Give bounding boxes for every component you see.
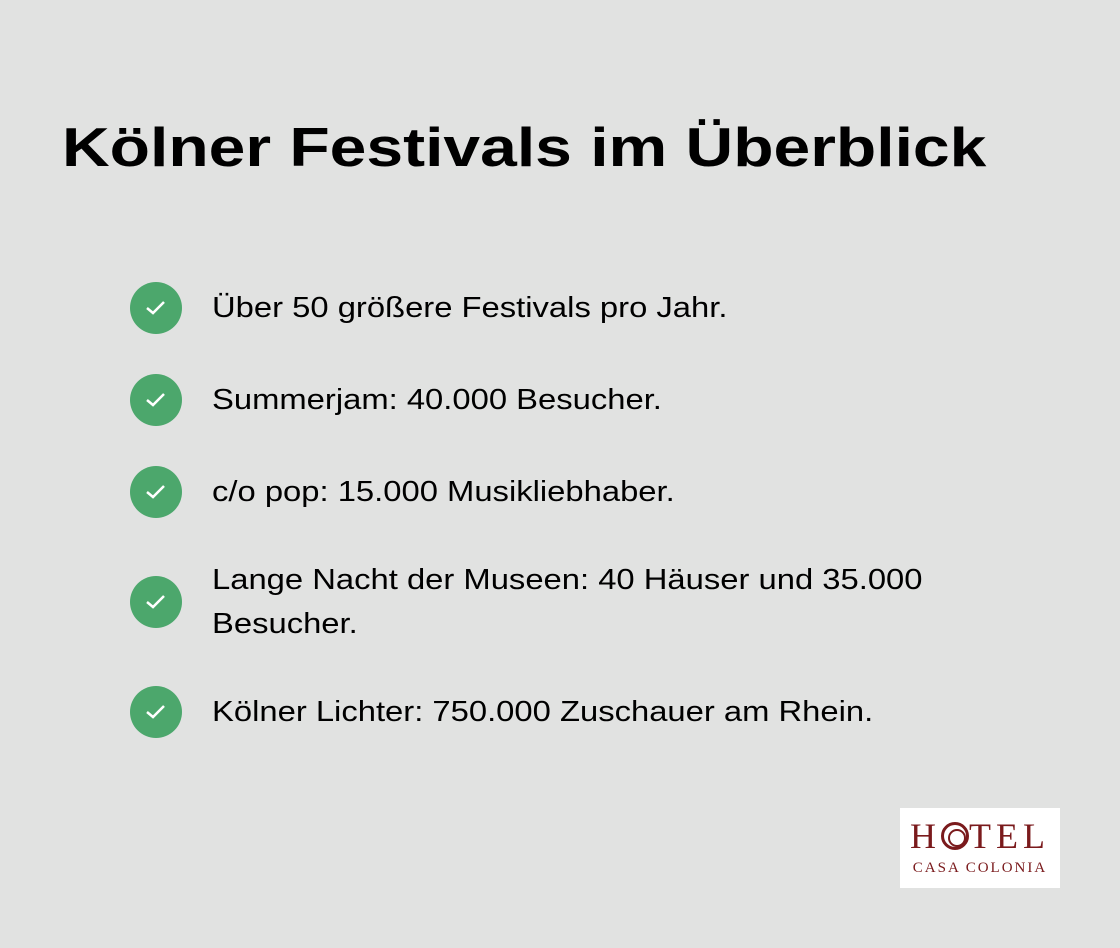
icon: check bbox=[130, 576, 182, 628]
icon: check bbox=[130, 466, 182, 518]
item 4 bbox=[130, 564, 923, 640]
icon: check bbox=[130, 686, 182, 738]
item 3 bbox=[130, 466, 675, 518]
text: Besucher. bbox=[212, 608, 358, 640]
item 1 bbox=[130, 282, 727, 334]
text bbox=[212, 564, 923, 640]
text: Lange Nacht der Museen: 40 Häuser und 35.000 bbox=[212, 564, 923, 596]
item 5 bbox=[130, 686, 873, 738]
icon: check bbox=[130, 282, 182, 334]
text: Kölner Lichter: 750.000 Zuschauer am Rhein. bbox=[212, 696, 873, 728]
text: Summerjam: 40.000 Besucher. bbox=[212, 384, 662, 416]
item 2 bbox=[130, 374, 662, 426]
logo bbox=[900, 808, 1060, 888]
text: Über 50 größere Festivals pro Jahr. bbox=[212, 292, 727, 324]
icon: check bbox=[130, 374, 182, 426]
text: c/o pop: 15.000 Musikliebhaber. bbox=[212, 476, 675, 508]
title: Kölner Festivals im Überblick bbox=[62, 116, 986, 178]
logo: CASA COLONIA bbox=[913, 860, 1047, 876]
logo: H TEL bbox=[910, 816, 1050, 856]
